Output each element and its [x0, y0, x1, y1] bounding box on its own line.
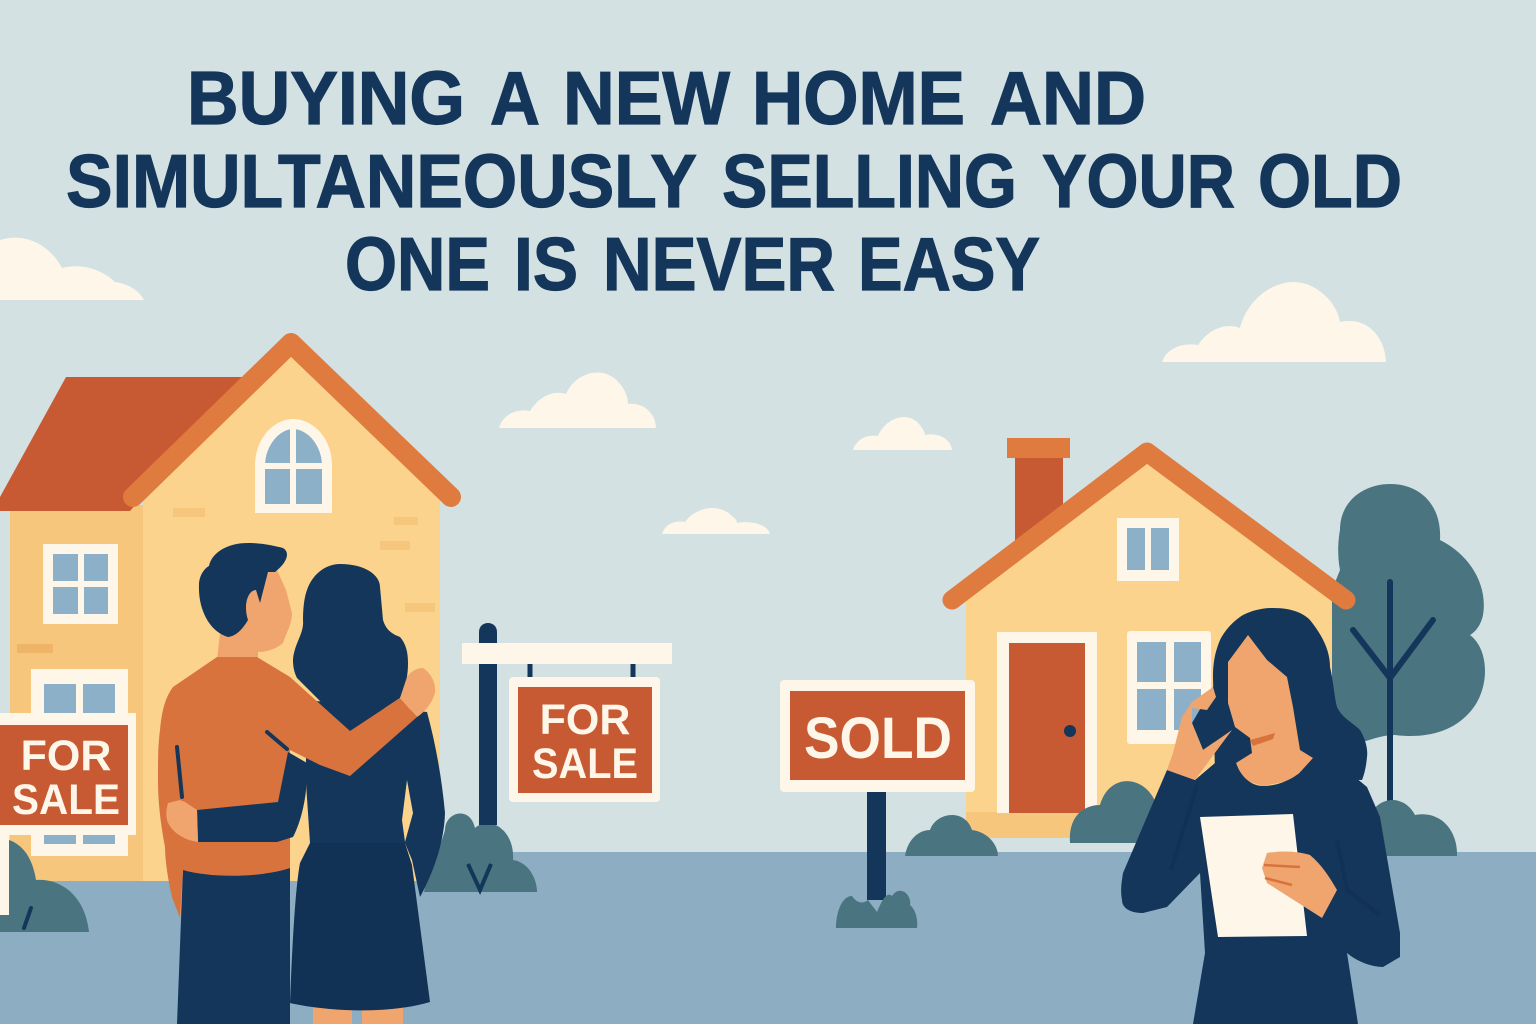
clipboard [1200, 814, 1307, 937]
bush behind post [424, 813, 537, 892]
lower window [1127, 631, 1211, 744]
sign text: SOLD [804, 706, 952, 771]
bush by small house [1070, 781, 1175, 843]
roof [952, 452, 1346, 600]
cloud: top right [1162, 282, 1386, 362]
bush by sold sign [905, 815, 998, 856]
title: YOUR [1042, 139, 1235, 223]
post [479, 623, 497, 825]
attic window [255, 419, 332, 513]
title: OLD [1258, 139, 1402, 223]
main roof [133, 343, 451, 497]
arm [462, 643, 672, 664]
left roof [0, 377, 245, 511]
for sale hanging sign [424, 623, 672, 892]
cloud: left [0, 238, 144, 300]
lower window [31, 669, 128, 856]
board [509, 677, 660, 802]
hand on clipboard [1262, 852, 1337, 918]
title [66, 56, 1402, 306]
woman torso and sleeve [306, 700, 445, 897]
clothing creases [177, 732, 287, 797]
woman hair [293, 564, 408, 731]
man hand on shoulder [400, 668, 435, 717]
cloud: small right [853, 417, 952, 450]
wall [966, 455, 1332, 835]
hand on phone [1167, 687, 1232, 780]
hair [1213, 608, 1367, 780]
left wing wall [10, 505, 150, 881]
upper window [1117, 518, 1179, 581]
title: HOME [752, 56, 965, 140]
bush at base [836, 891, 917, 928]
title: AND [990, 56, 1146, 140]
sign text: FOR [540, 696, 630, 744]
cloud: middle [499, 373, 656, 428]
bush right [1370, 800, 1457, 856]
man neck and face [217, 570, 292, 660]
side window [43, 544, 118, 624]
agent [1121, 608, 1400, 1024]
sleeve creases [1171, 785, 1380, 915]
title: SELLING [722, 139, 1017, 223]
door [997, 632, 1097, 813]
for sale sign left [0, 713, 136, 915]
for sale sign left: SALE [12, 776, 120, 824]
woman skirt [290, 843, 430, 1010]
woman legs [313, 1000, 403, 1024]
tree [1332, 484, 1485, 805]
small house [952, 438, 1346, 838]
title: NEW [563, 56, 730, 140]
cloud: small centre [662, 508, 770, 534]
man hand sliver [172, 880, 186, 918]
brick marks [17, 508, 435, 653]
title: BUYING [187, 56, 465, 140]
title: ONE [345, 222, 490, 306]
sign text: FOR [21, 732, 111, 780]
face and neck [1228, 635, 1313, 786]
phone [1192, 687, 1232, 750]
title: EASY [858, 222, 1040, 306]
neck shadow [1250, 733, 1275, 746]
title: NEVER [603, 222, 835, 306]
wrist hand [166, 800, 198, 842]
chimney [1015, 450, 1063, 550]
man hair [199, 543, 287, 637]
man trousers [177, 866, 290, 1024]
finger lines [1264, 865, 1300, 885]
post [0, 830, 9, 915]
sold sign [780, 680, 975, 928]
ground [0, 852, 1536, 1024]
title: SIMULTANEOUSLY [66, 139, 697, 223]
large house [0, 343, 451, 881]
couple [158, 543, 445, 1024]
gap between arm and waist [402, 780, 413, 842]
post [867, 785, 886, 900]
man sweater [158, 657, 417, 918]
title: IS [514, 222, 578, 306]
man waist-wrapping arm [197, 752, 307, 842]
main wall [143, 352, 440, 881]
bush left [0, 838, 89, 932]
title: A [490, 56, 540, 140]
body [1121, 758, 1400, 1024]
for sale hanging sign: SALE [532, 740, 638, 788]
board [780, 680, 975, 792]
